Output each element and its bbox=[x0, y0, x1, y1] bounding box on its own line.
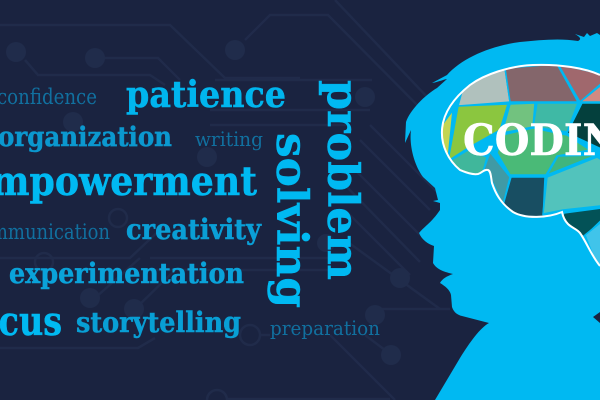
word: confidence: confidence bbox=[0, 85, 97, 109]
word: patience: patience bbox=[126, 74, 286, 116]
brain colour segments bbox=[436, 64, 600, 268]
brain white outline bbox=[442, 65, 600, 266]
word: creativity: creativity bbox=[126, 213, 262, 246]
word: storytelling: storytelling bbox=[76, 306, 241, 339]
word: organization: organization bbox=[0, 122, 172, 153]
child head silhouette bbox=[405, 33, 600, 400]
word: preparation: preparation bbox=[270, 316, 380, 340]
word cloud bbox=[0, 74, 380, 345]
word: solving (vertical): solving bbox=[266, 133, 316, 308]
brain illustration bbox=[436, 64, 600, 268]
word: writing: writing bbox=[195, 127, 263, 151]
circuit board pattern bbox=[0, 0, 450, 400]
word: problem (vertical): problem bbox=[317, 80, 367, 280]
word: experimentation: experimentation bbox=[9, 257, 244, 290]
circuit nodes bbox=[6, 40, 410, 365]
brain base bbox=[442, 65, 600, 266]
